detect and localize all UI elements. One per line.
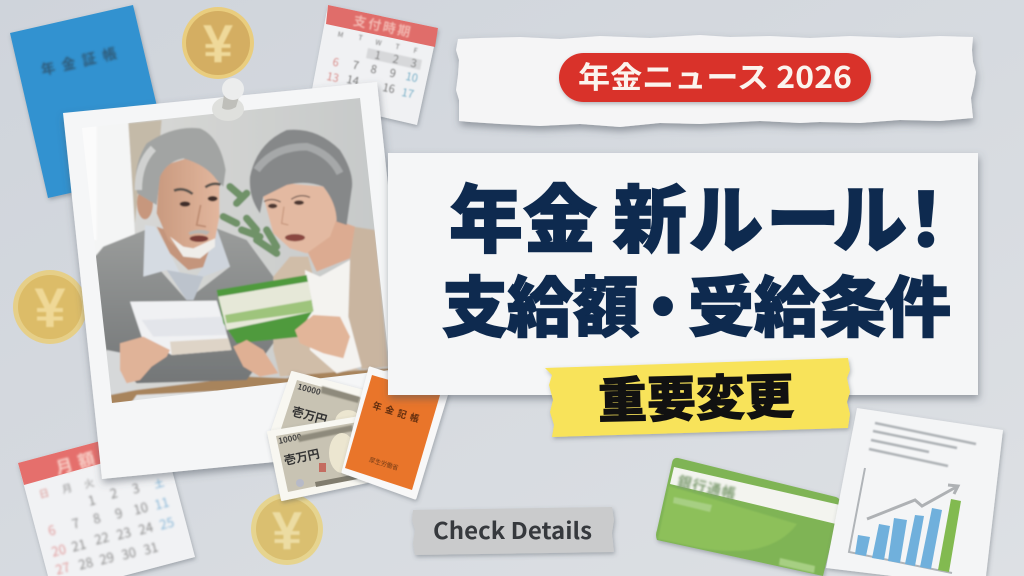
icon: yen coin top [182,7,254,79]
icon: payment calendar top: 16 [381,79,396,97]
icon: monthly calendar bottom: 月 [53,450,76,479]
icon: yen coin top: ¥ [203,14,233,74]
icon: monthly calendar bottom: 28 [76,552,95,574]
icon: bank passbook [656,458,840,576]
icon: payment calendar top: 8 [369,61,378,78]
icon: monthly calendar bottom: 11 [152,492,171,514]
icon: monthly calendar bottom: 1 [86,490,98,510]
icon: monthly calendar bottom: 7 [70,513,82,533]
icon: yen coin left [13,270,87,344]
icon: monthly calendar bottom: 24 [136,517,155,539]
icon: yen bills: 10000 [296,381,322,398]
icon: monthly calendar bottom: 21 [69,534,88,556]
icon: monthly calendar bottom: 2 [108,483,120,503]
icon: payment calendar top: M [337,30,344,41]
icon: payment calendar top: 17 [400,84,415,102]
icon: yen bills: 壱万円 [290,402,329,428]
icon: monthly calendar bottom [18,425,195,576]
icon: monthly calendar bottom: 23 [114,522,133,544]
badge: red pill [559,53,871,102]
icon: monthly calendar bottom: 8 [91,508,103,528]
button text: Check Details [433,512,592,546]
icon: report document with chart [826,408,1003,576]
icon: monthly calendar bottom: 25 [157,512,176,534]
table [111,368,388,403]
icon: payment calendar top: 支付時期 [352,10,414,41]
icon: payment calendar top: 14 [345,71,360,89]
hands and documents [120,275,350,383]
plant [223,187,277,253]
push pin [212,78,244,121]
icon: payment calendar top: 9 [388,65,397,82]
icon: monthly calendar bottom: 29 [97,547,116,569]
icon: blue pension notebook [10,5,172,198]
torn paper header strip [456,35,976,127]
title line 2: 支給額・受給条件 [442,255,951,351]
yellow tape label [545,358,850,437]
title line 1: 年金 新ルール！ [449,161,963,268]
icon: payment calendar top [310,5,438,125]
icon: payment calendar top: F [412,46,418,56]
icon: monthly calendar bottom: 火 [82,474,96,491]
icon: payment calendar top: 13 [325,68,340,86]
icon: monthly calendar bottom: 22 [92,527,111,549]
icon: monthly calendar bottom: 月 [60,479,74,496]
icon: payment calendar top: T [394,42,401,52]
woman [250,130,388,377]
label text: 重要変更 [597,358,795,433]
icon: yen bills: 壱万円 [282,445,321,469]
icon: yen coin bottom [251,493,323,565]
icon: payment calendar top: 3 [409,55,418,72]
icon: payment calendar top: T [357,33,364,43]
icon: monthly calendar bottom: 9 [113,503,125,523]
icon: payment calendar top: 1 [373,47,382,64]
icon: monthly calendar bottom: 30 [119,542,138,564]
icon: monthly calendar bottom: 20 [49,539,68,561]
icon: monthly calendar bottom: 6 [46,520,58,540]
icon: yen coin bottom: ¥ [272,501,302,561]
badge text: 年金ニュース 2026 [578,53,852,97]
icon: bank passbook: 銀行通帳 [676,472,738,504]
photo print [60,78,416,479]
main title panel [388,153,978,395]
icon: payment calendar top: 6 [331,54,340,71]
icon: monthly calendar bottom: 土 [152,474,166,491]
icon: blue pension notebook: 年金証帳 [39,42,125,80]
check details tape button [412,507,614,555]
icon: orange pension book [343,368,447,498]
icon: payment calendar top: W [374,38,382,49]
icon: payment calendar top: 2 [391,51,400,68]
icon: payment calendar top: 10 [404,68,419,86]
icon: yen bills: 10000 [277,431,303,447]
icon: monthly calendar bottom: 3 [130,478,142,498]
icon: monthly calendar bottom: 10 [131,497,150,519]
icon: monthly calendar bottom: 額 [75,444,98,473]
icon: payment calendar top: 7 [351,57,360,74]
icon: yen coin left: ¥ [34,276,66,339]
icon: yen bills [268,372,367,500]
icon: monthly calendar bottom: 日 [37,484,51,501]
icon: monthly calendar bottom: 31 [141,537,160,559]
photograph of elderly couple [96,98,388,403]
man [95,128,273,395]
icon: orange pension book: 厚生労働省 [368,455,400,472]
icon: orange pension book: 年金記帳 [371,399,425,426]
